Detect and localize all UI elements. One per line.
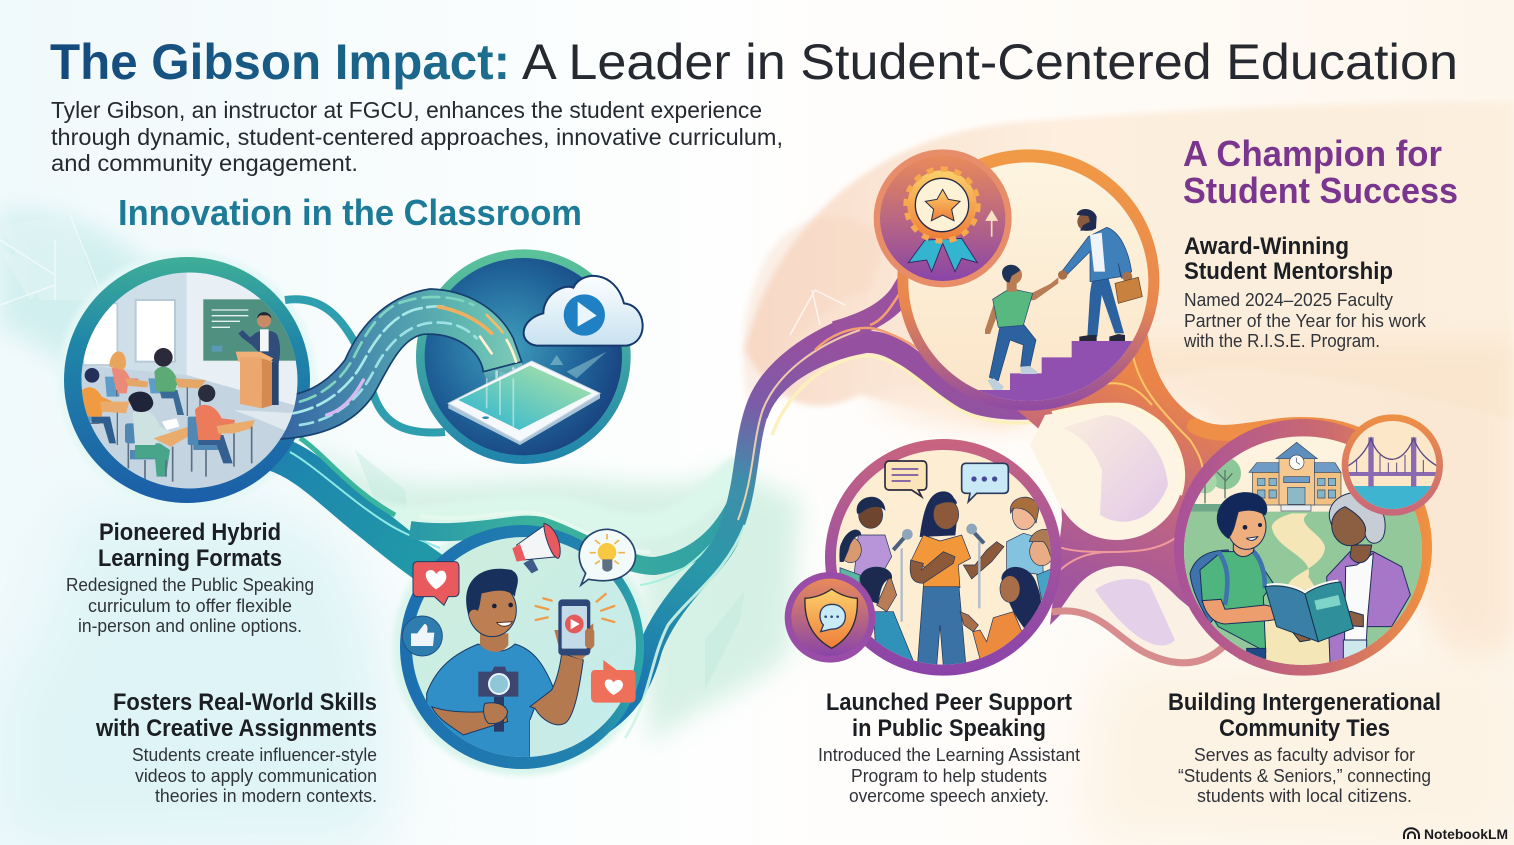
illustration: mentor figure [1058,209,1142,341]
panel: lilac shard [1062,415,1168,522]
text block: launched peer support: in Public Speaking [852,715,1046,742]
text block: pioneered hybrid learning formats [66,519,314,636]
text block: award-winning student mentorship: Award-Winning [1184,233,1349,260]
text block: fosters real-world skills: Students create influencer-style [132,745,377,765]
illustration: stairs [978,341,1132,401]
icon: shield [785,572,875,663]
icon: text bubble [885,461,927,497]
illustration: student with backpack [1190,493,1283,658]
connecting ribbons [58,251,1060,776]
title [50,34,1458,90]
text block: pioneered hybrid learning formats: Redesigned the Public Speaking [66,575,314,595]
ribbon: teal loops behind tablet [285,299,445,433]
icon: heart bubble [413,562,459,605]
illustration: creator [427,569,583,765]
illustration: middle student [125,392,197,482]
text block: launched peer support: Program to help students [851,766,1047,786]
text block: award-winning student mentorship: with the R.I.S.E. Program. [1183,331,1380,351]
text block: fosters real-world skills: with Creative Assignments [95,715,377,742]
illustration: classroom interior [80,270,300,490]
title: The Gibson Impact: [50,34,510,90]
icon: phone [536,594,614,660]
icon: light bulb bubble [579,529,635,585]
text block: fosters real-world skills: Fosters Real-World Skills [113,689,377,716]
text block: award-winning student mentorship: Named 2024–2025 Faculty [1184,290,1393,310]
logo: NotebookLM: NotebookLM [1424,826,1508,842]
illustration: teacher [236,312,280,408]
illustration: right student [188,385,255,477]
text block: building intergenerational community ties: Community Ties [1219,715,1390,742]
panel: pale pocket between mentor and peer [1030,403,1183,540]
panel: peer support illustration [785,439,1063,676]
illustration: school building [1249,442,1341,511]
icon: bridge [1342,414,1443,516]
text block: pioneered hybrid learning formats: Pioneered Hybrid [99,519,281,546]
illustration: audience [840,497,1063,665]
panel: lilac shard lower [1095,579,1175,646]
panel: classroom ring [64,257,310,503]
text block: building intergenerational community ties [1168,689,1441,806]
icon: light beams [497,352,607,395]
heading: a champion for student success: A Champion for [1183,133,1442,174]
text block: fosters real-world skills: videos to apply communication [135,766,377,786]
intro text: Tyler Gibson, an instructor at FGCU, enhances the student experience [51,97,762,123]
text block: award-winning student mentorship [1183,233,1427,351]
text block: launched peer support [818,689,1080,806]
icon: thumbs up [402,616,442,656]
icon: cloud with play button [524,276,643,346]
text block: building intergenerational community ties: students with local citizens. [1197,786,1412,806]
intro text: through dynamic, student-centered approaches, innovative curriculum, [51,124,783,150]
text block: fosters real-world skills: theories in modern contexts. [155,786,377,806]
text block: launched peer support: overcome speech anxiety. [849,786,1049,806]
intro text [51,97,783,176]
heading: innovation in the classroom: Innovation in the Classroom [118,192,582,233]
icon: open book [1265,581,1353,642]
panel: pale pocket between peer and community [1057,566,1225,663]
illustration: speaker [910,492,1004,667]
panel: classroom scene [80,270,300,490]
ribbon: pale halos [58,251,735,776]
ribbon: data stream [280,289,528,439]
illustration: senior woman [1327,492,1410,663]
text block: launched peer support: Launched Peer Support [826,689,1072,716]
text block: building intergenerational community ties: Building Intergenerational [1168,689,1441,716]
icon: dots bubble [962,463,1008,502]
ribbon: classroom to video band [270,438,440,575]
illustration: kneeling woman [960,567,1041,659]
icon: orange heart bubble [591,660,636,703]
heading: a champion for student success: Student Success [1183,170,1458,211]
text block: award-winning student mentorship: Student Mentorship [1184,258,1393,285]
illustration: microphones [893,524,984,622]
text block: building intergenerational community ties: Serves as faculty advisor for [1194,745,1415,765]
icon: award badge [874,149,1012,287]
illustration: back row students [105,348,206,416]
text block: pioneered hybrid learning formats: curriculum to offer flexible [88,596,292,616]
text block: building intergenerational community ties: “Students & Seniors,” connecting [1178,766,1431,786]
intro text: and community engagement. [51,150,358,176]
text block: pioneered hybrid learning formats: Learning Formats [98,545,282,572]
illustration: winding path [1265,513,1338,667]
panel: tablet and cloud illustration [280,249,643,464]
icon: megaphone [512,523,560,573]
ribbon: orange band above community [1195,425,1372,442]
text block: launched peer support: Introduced the Learning Assistant [818,745,1080,765]
ribbon: main flow up to mentor [598,270,1060,738]
text block: pioneered hybrid learning formats: in-person and online options. [78,616,302,636]
panel: community illustration [1174,414,1443,676]
text block: award-winning student mentorship: Partner of the Year for his work [1184,311,1427,331]
illustration: left student [82,368,129,445]
ribbon: top strand over video circle [410,465,746,585]
panel: creator video illustration [400,523,644,769]
title: A Leader in Student-Centered Education [522,34,1458,90]
illustration: student figure [985,265,1058,390]
heading: a champion for student success [1183,133,1458,211]
ribbon: mentor to community junction [1000,320,1372,663]
panel: mentorship illustration [874,149,1159,411]
icon: tablet [448,361,600,445]
text block: fosters real-world skills [95,689,377,806]
